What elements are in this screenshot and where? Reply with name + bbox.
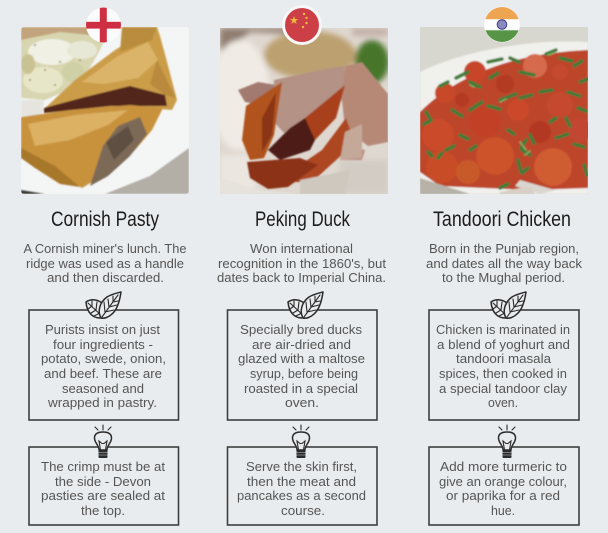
intro text: Peking Duck: dates back to Imperial China. — [217, 270, 386, 285]
intro text: Cornish Pasty: ridge was used as a handle — [26, 256, 184, 271]
tip text: Peking Duck: course. — [281, 503, 325, 518]
icon: light bulb, Tandoori Chicken — [498, 425, 516, 458]
tip text: Peking Duck: Serve the skin first, — [246, 459, 357, 474]
icon: light bulb, Peking Duck — [292, 425, 310, 458]
tip text: Tandoori Chicken: give an orange colour, — [439, 474, 567, 489]
panel: Peking Duck method — [228, 310, 377, 420]
heading: Peking Duck: Peking Duck — [255, 208, 350, 231]
icon: leaves, Peking Duck — [288, 292, 323, 318]
panel: Tandoori Chicken method — [429, 310, 579, 420]
method text: Tandoori Chicken: tandoori masala — [456, 351, 552, 366]
intro text: Tandoori Chicken: and dates all the way back — [426, 256, 582, 271]
intro text: Peking Duck: Won international — [250, 241, 353, 256]
tip text: Peking Duck: then the meat and — [247, 474, 356, 489]
photo: Cornish pasty — [21, 27, 189, 194]
method text: Peking Duck: syrup, before being — [250, 366, 358, 381]
method text: Tandoori Chicken: oven. — [488, 395, 518, 410]
method text: Tandoori Chicken — [436, 322, 570, 410]
intro text: Peking Duck: recognition in the 1860's, but — [218, 256, 386, 271]
intro text: Cornish Pasty — [24, 241, 186, 285]
intro text: Tandoori Chicken: Born in the Punjab region, — [429, 241, 579, 256]
intro text: Cornish Pasty: and then discarded. — [47, 270, 164, 285]
tip text: Cornish Pasty: the side - Devon — [55, 474, 151, 489]
icon: light bulb, Cornish Pasty — [94, 425, 112, 458]
tip text: Tandoori Chicken: or paprika for a red — [446, 488, 560, 503]
intro text: Cornish Pasty: A Cornish miner's lunch. The — [24, 241, 186, 256]
photo: Tandoori chicken — [420, 27, 592, 194]
heading: Tandoori Chicken: Tandoori Chicken — [433, 208, 571, 231]
flag: India — [484, 6, 520, 42]
tip text: Cornish Pasty: The crimp must be at — [41, 459, 165, 474]
method text: Peking Duck: roasted in a special — [244, 381, 358, 396]
method text: Peking Duck — [238, 322, 365, 410]
icon: leaves, Tandoori Chicken — [491, 292, 526, 318]
method text: Peking Duck: oven. — [285, 395, 319, 410]
photo: Peking duck — [210, 28, 389, 194]
method text: Tandoori Chicken: Chicken is marinated in — [436, 322, 570, 337]
intro text: Tandoori Chicken: to the Mughal period. — [442, 270, 565, 285]
tip text: Tandoori Chicken: Add more turmeric to — [440, 459, 567, 474]
panel: Cornish Pasty tip — [29, 447, 178, 525]
method text: Cornish Pasty: seasoned and — [62, 381, 144, 396]
intro text: Peking Duck — [217, 241, 386, 285]
tip text: Cornish Pasty: the top. — [81, 503, 125, 518]
method text: Peking Duck: are air-dried and — [252, 337, 351, 352]
icon: leaves, Cornish Pasty — [86, 292, 121, 318]
intro text: Tandoori Chicken — [426, 241, 582, 285]
method text: Cornish Pasty: and beef. These are — [44, 366, 162, 381]
heading: Cornish Pasty: Cornish Pasty — [51, 208, 159, 231]
tip text: Cornish Pasty — [41, 459, 165, 518]
panel: Tandoori Chicken tip — [429, 447, 579, 525]
method text: Cornish Pasty: four ingredients - — [53, 337, 153, 352]
panel: Cornish Pasty method — [29, 310, 178, 420]
tip text: Tandoori Chicken: hue. — [491, 503, 515, 518]
flag: China: ★ — [289, 14, 299, 27]
method text: Cornish Pasty — [41, 322, 166, 410]
flag: England — [86, 8, 121, 42]
method text: Cornish Pasty: potato, swede, onion, — [41, 351, 166, 366]
tip text: Tandoori Chicken — [439, 459, 567, 518]
panel: Peking Duck tip — [228, 447, 377, 525]
method text: Tandoori Chicken: a special tandoor clay — [439, 381, 567, 396]
tip text: Cornish Pasty: pasties are sealed at — [41, 488, 165, 503]
method text: Tandoori Chicken: spices, then cooked in — [439, 366, 567, 381]
tip text: Peking Duck: pancakes as a second — [237, 488, 366, 503]
method text: Cornish Pasty: Purists insist on just — [45, 322, 160, 337]
method text: Peking Duck: Specially bred ducks — [240, 322, 362, 337]
flag: China — [282, 5, 322, 45]
tip text: Peking Duck — [237, 459, 366, 518]
method text: Cornish Pasty: wrapped in pastry. — [47, 395, 157, 410]
method text: Peking Duck: glazed with a maltose — [238, 351, 365, 366]
method text: Tandoori Chicken: a blend of yoghurt and — [437, 337, 570, 352]
